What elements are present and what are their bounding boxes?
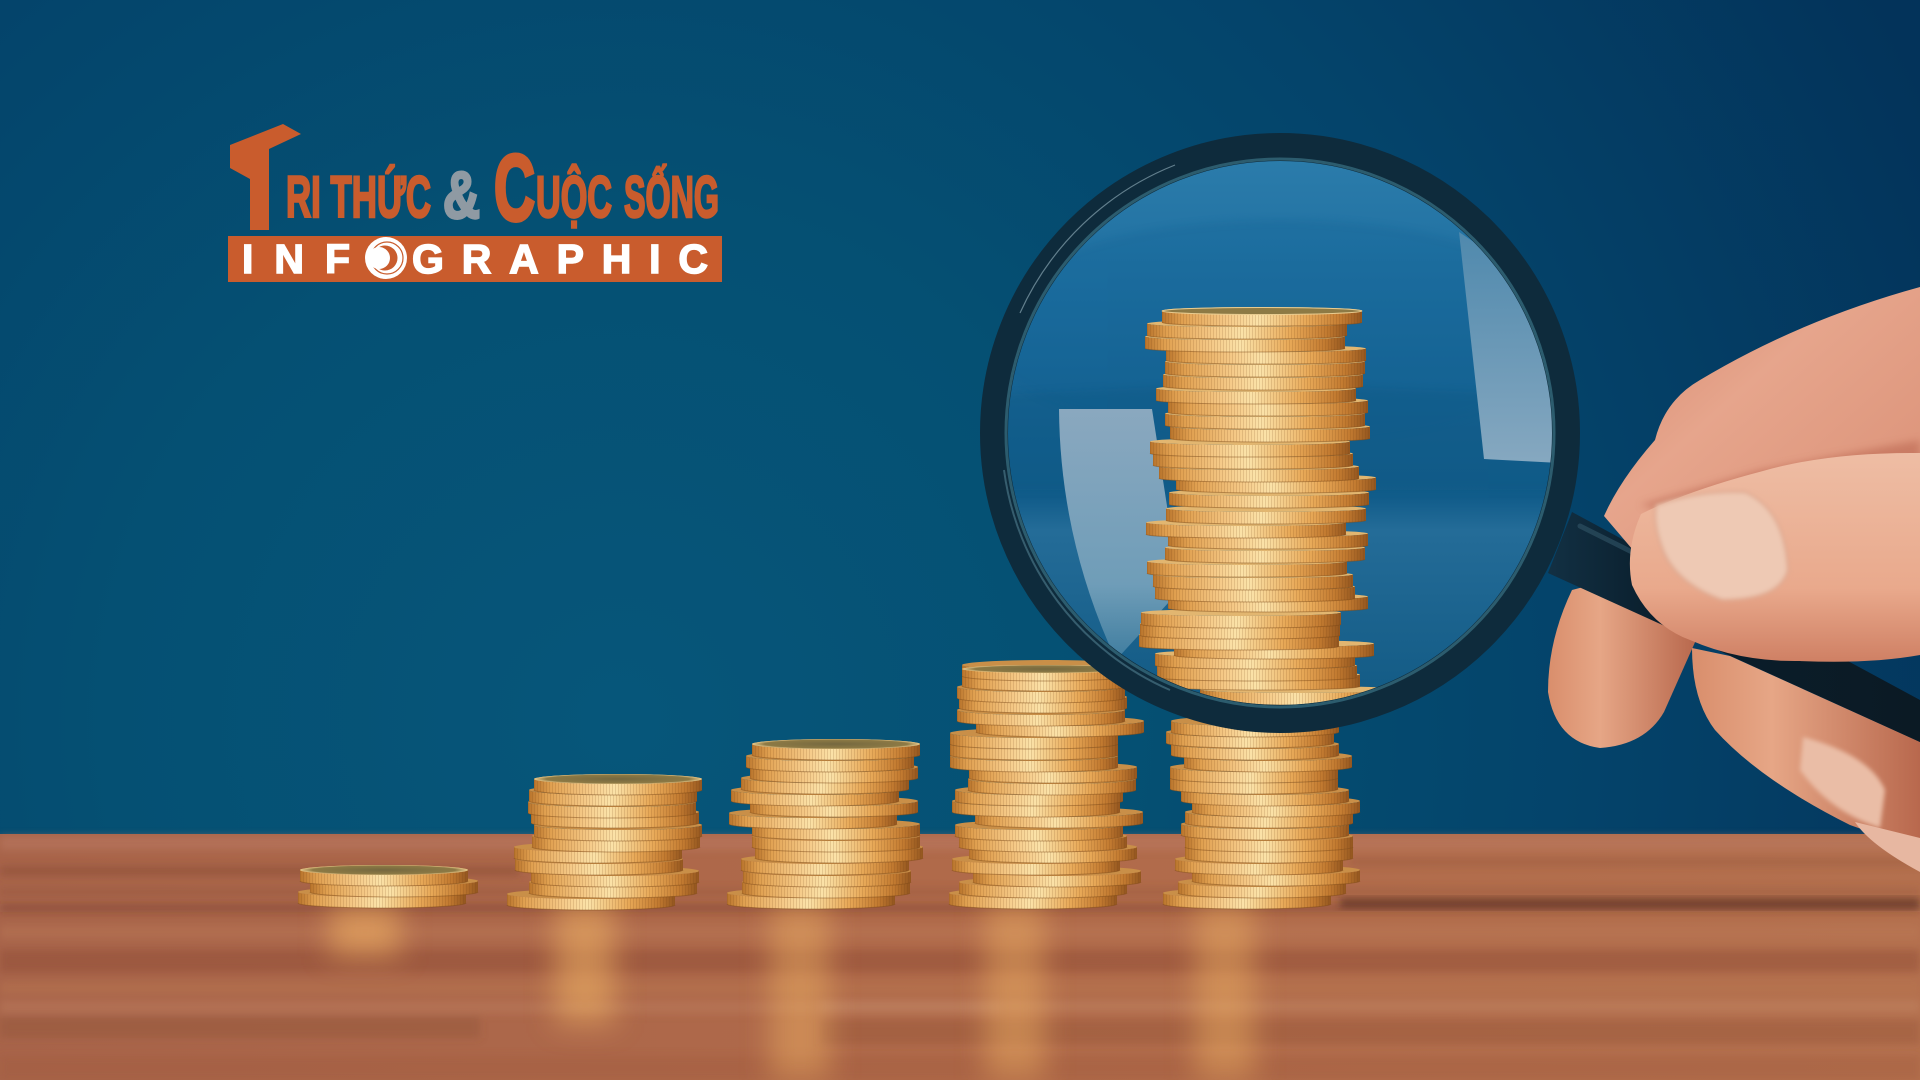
logo text: large C: C [494,135,535,240]
banner text: INF: INF [242,236,350,282]
banner text: GRAPHIC: GRAPHIC [412,236,708,282]
thumb [1630,453,1920,662]
coin stack 2 [507,774,702,910]
coin stack 1 [298,865,478,908]
background wall [0,0,1920,836]
logo text: ampersand: & [443,158,480,232]
fingernail: thumb [1655,492,1788,600]
lower right finger [1692,648,1920,838]
wooden table [0,834,1920,1080]
lens background bands [980,220,1580,440]
coin reflections on table [330,904,1255,1079]
icon: magnifying glass lens [980,147,1580,719]
lower finger behind handle [1548,580,1696,748]
illustration: fingers behind the handle [1548,580,1920,872]
logo banner [228,236,722,282]
coin stack 4 [949,660,1144,909]
logo: Tri Thức & Cuộc Sống Infographic [228,124,722,282]
lens rim [994,147,1566,719]
icon: magnifying glass handle [1548,512,1920,742]
logo text: RI THỨC: RI THỨC [286,165,431,230]
logo icon: letter T [230,124,301,230]
illustration: index finger and thumb [1604,287,1920,662]
coin stack 3 [727,739,923,909]
logo icon: stylised O [365,237,407,279]
index finger [1604,287,1920,570]
logo text: UỘC: UỘC [536,165,612,230]
little finger [1855,822,1920,872]
logo text: SỐNG: SỐNG [624,165,719,230]
magnified coin stack [1139,307,1400,705]
right window reflection [1459,232,1560,463]
lens glass [1007,159,1553,705]
table shadow [1340,898,1920,908]
finger behind thumb shadow [1640,440,1920,520]
fingernail: lower finger [1800,737,1885,828]
coin stack 5 [1163,716,1360,909]
left window reflection [1059,409,1180,660]
